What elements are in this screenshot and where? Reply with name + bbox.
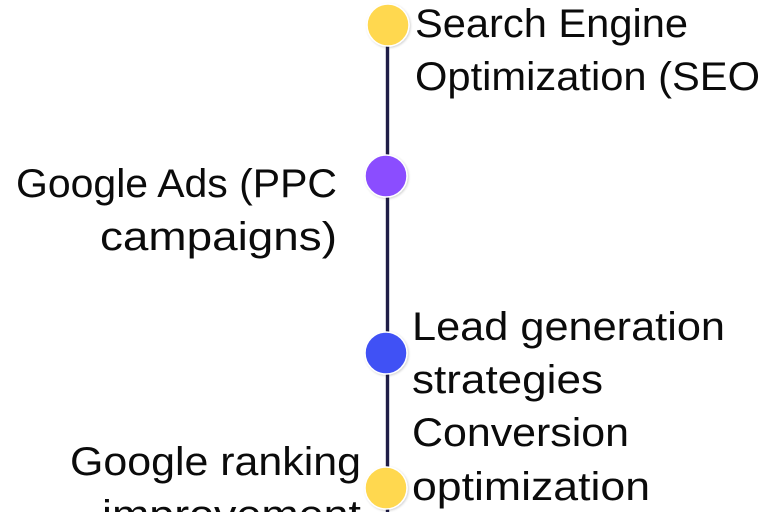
label: Lead generation strategies: [412, 305, 725, 402]
label: Conversion optimization: Conversion: [412, 411, 629, 455]
label: Lead generation strategies: strategies: [412, 358, 603, 402]
label: Search Engine Optimization: Search Engine: [415, 2, 688, 46]
marker: yellow circle 1: [367, 4, 409, 46]
label: Search Engine Optimization: [415, 2, 760, 99]
label: Lead generation strategies: Lead generation: [412, 305, 725, 349]
label: Conversion optimization: [412, 411, 650, 509]
label: Search Engine Optimization: Optimization (SEO: [415, 55, 760, 99]
label: Google ranking improvement: Google ranking: [70, 440, 361, 484]
label: Google ranking improvement: [70, 440, 361, 512]
marker: blue circle: [365, 332, 407, 374]
timeline vertical line: [386, 40, 389, 512]
node: lead generation: [365, 305, 725, 402]
marker: yellow circle 2: [365, 467, 407, 509]
node: search engine optimization: [367, 2, 760, 99]
label: Conversion optimization: optimization: [412, 465, 650, 509]
label: Google Ads PPC campaigns: campaigns): [100, 215, 337, 259]
label: Google Ads PPC campaigns: Google Ads (PPC: [16, 162, 337, 206]
node: conversion and ranking: [70, 411, 650, 512]
node: google ads: [16, 155, 407, 259]
marker: purple circle: [365, 155, 407, 197]
label: Google Ads PPC campaigns: [16, 162, 337, 259]
